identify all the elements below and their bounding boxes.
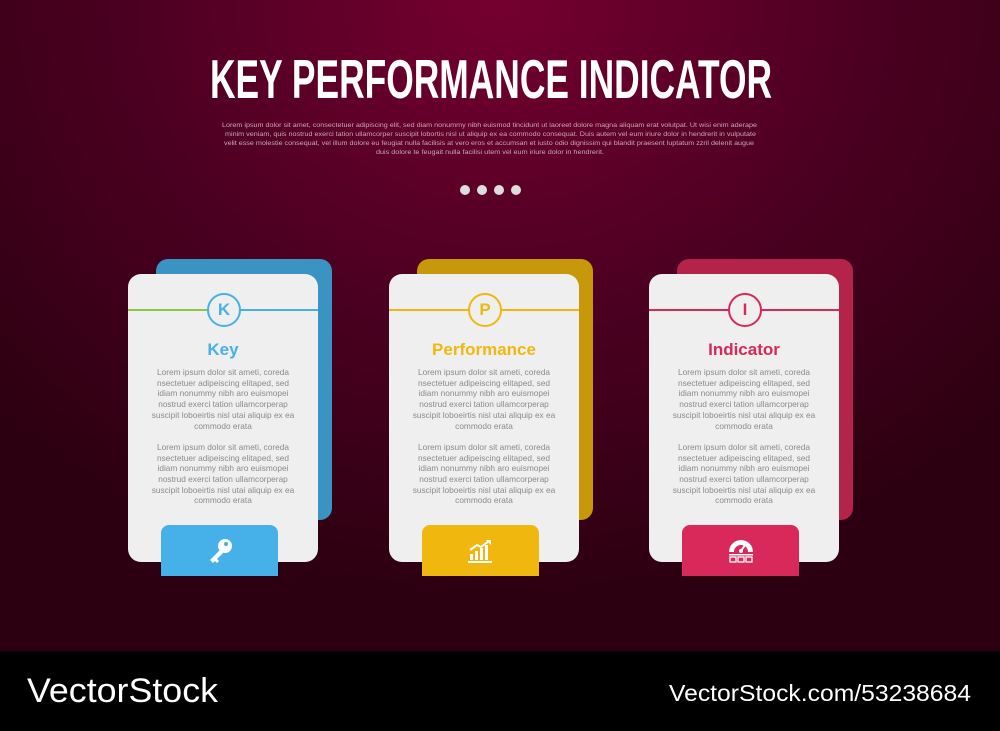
text: key body: Lorem ipsum dolor sit ameti, coreda nsectetuer adipeiscing elitaped, sed idiam nonummy nibh aro euismopei nostrud exerci tation ullamcorperap suscipit loboeirtis nisl utai aliquip ex ea commodo erata xyxy=(152,367,294,431)
text: performance body xyxy=(413,367,556,505)
icon: K circle xyxy=(207,293,241,327)
icon: I circle: I xyxy=(743,300,747,319)
intro paragraph: duis dolore te feugait nulla facilisi utem vel eum iriure dolor in hendrerit. xyxy=(376,149,604,156)
text: indicator body: Lorem ipsum dolor sit ameti, coreda nsectetuer adipeiscing elitaped, sed idiam nonummy nibh aro euismopei nostrud exerci tation ullamcorperap suscipit loboeirtis nisl utai aliquip ex ea commodo erata xyxy=(673,367,815,431)
footer bar xyxy=(0,651,1000,731)
text: performance body: Lorem ipsum dolor sit ameti, coreda nsectetuer adipeiscing elitaped, sed idiam nonummy nibh aro euismopei nostrud exerci tation ullamcorperap suscipit loboeirtis nisl utai aliquip ex ea commodo erata xyxy=(413,367,555,431)
panel: indicator xyxy=(649,259,853,576)
text: key body: Lorem ipsum dolor sit ameti, coreda nsectetuer adipeiscing elitaped, sed idiam nonummy nibh aro euismopei nostrud exerci tation ullamcorperap suscipit loboeirtis nisl utai aliquip ex ea commodo erata xyxy=(152,442,294,505)
heading: Key: Key xyxy=(207,340,239,359)
text: performance body: Lorem ipsum dolor sit ameti, coreda nsectetuer adipeiscing elitaped, sed idiam nonummy nibh aro euismopei nostrud exerci tation ullamcorperap suscipit loboeirtis nisl utai aliquip ex ea commodo erata xyxy=(413,442,555,505)
footer logo: VectorStock xyxy=(27,672,219,710)
icon: K circle: K xyxy=(218,300,230,319)
intro paragraph: Lorem ipsum dolor sit amet, consectetuer adipiscing elit, sed diam nonummy nibh euismod tincidunt ut laoreet dolore magna aliquam erat volutpat. Ut wisi enim aderape xyxy=(222,122,757,129)
icon: P circle: P xyxy=(479,300,491,319)
footer url: VectorStock.com/53238684 xyxy=(669,680,971,706)
icon: chart xyxy=(422,525,539,576)
icon: P circle xyxy=(468,293,502,327)
intro paragraph: velit esse molestie consequat, vel illum dolore eu feugiat nulla facilisis at vero eros et accumsan et iusto odio dignissim qui blandit praesent luptatum zzril delenit augue xyxy=(224,140,754,147)
icon: key xyxy=(161,525,278,576)
text: key body xyxy=(152,367,294,505)
intro paragraph xyxy=(222,122,757,156)
intro paragraph: minim veniam, quis nostrud exerci tation ullamcorper suscipit lobortis nisl ut aliquip ex ea commodo consequat. Duis autem vel eum iriure dolor in hendrerit in vulputate xyxy=(225,131,756,138)
icon: gauge xyxy=(682,525,799,576)
heading: Performance: Performance xyxy=(432,340,536,359)
panel: key xyxy=(128,259,332,576)
heading: Indicator: Indicator xyxy=(708,340,780,359)
text: indicator body: Lorem ipsum dolor sit ameti, coreda nsectetuer adipeiscing elitaped, sed idiam nonummy nibh aro euismopei nostrud exerci tation ullamcorperap suscipit loboeirtis nisl utai aliquip ex ea commodo erata xyxy=(673,442,815,505)
text: indicator body xyxy=(673,367,816,505)
panel: performance xyxy=(389,259,593,576)
dots xyxy=(460,185,521,195)
icon: I circle xyxy=(728,293,762,327)
